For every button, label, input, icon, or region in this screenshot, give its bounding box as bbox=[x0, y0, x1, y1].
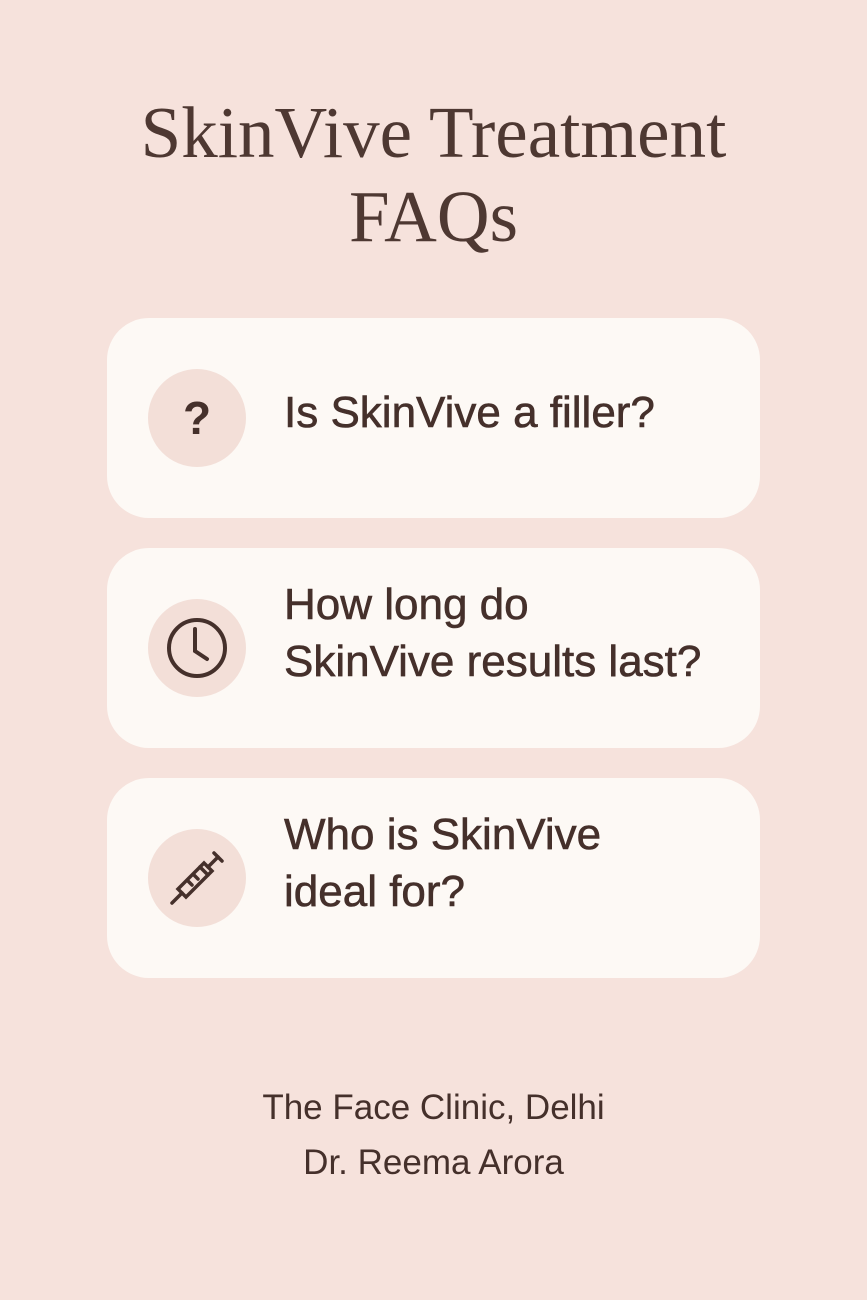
title bbox=[141, 92, 726, 257]
card: filler question bbox=[107, 318, 760, 518]
title: SkinVive Treatment bbox=[141, 92, 726, 173]
question text: Who is SkinVive bbox=[284, 810, 601, 859]
question text: Is SkinVive a filler? bbox=[284, 388, 655, 437]
icon: question mark: ? bbox=[183, 392, 211, 444]
question text bbox=[284, 580, 701, 686]
question text: How long do bbox=[284, 580, 529, 629]
icon: question mark bbox=[148, 369, 246, 467]
card: results duration question bbox=[107, 548, 760, 748]
footer: clinic and doctor bbox=[262, 1088, 605, 1182]
card: ideal candidate question bbox=[107, 778, 760, 978]
footer: clinic and doctor: Dr. Reema Arora bbox=[303, 1143, 564, 1182]
question text: SkinVive results last? bbox=[284, 637, 701, 686]
icon: syringe bbox=[148, 829, 246, 927]
icon: clock bbox=[148, 599, 246, 697]
question text: ideal for? bbox=[284, 867, 465, 916]
title: FAQs bbox=[349, 176, 518, 257]
footer: clinic and doctor: The Face Clinic, Delhi bbox=[262, 1088, 605, 1127]
question text bbox=[284, 810, 601, 916]
